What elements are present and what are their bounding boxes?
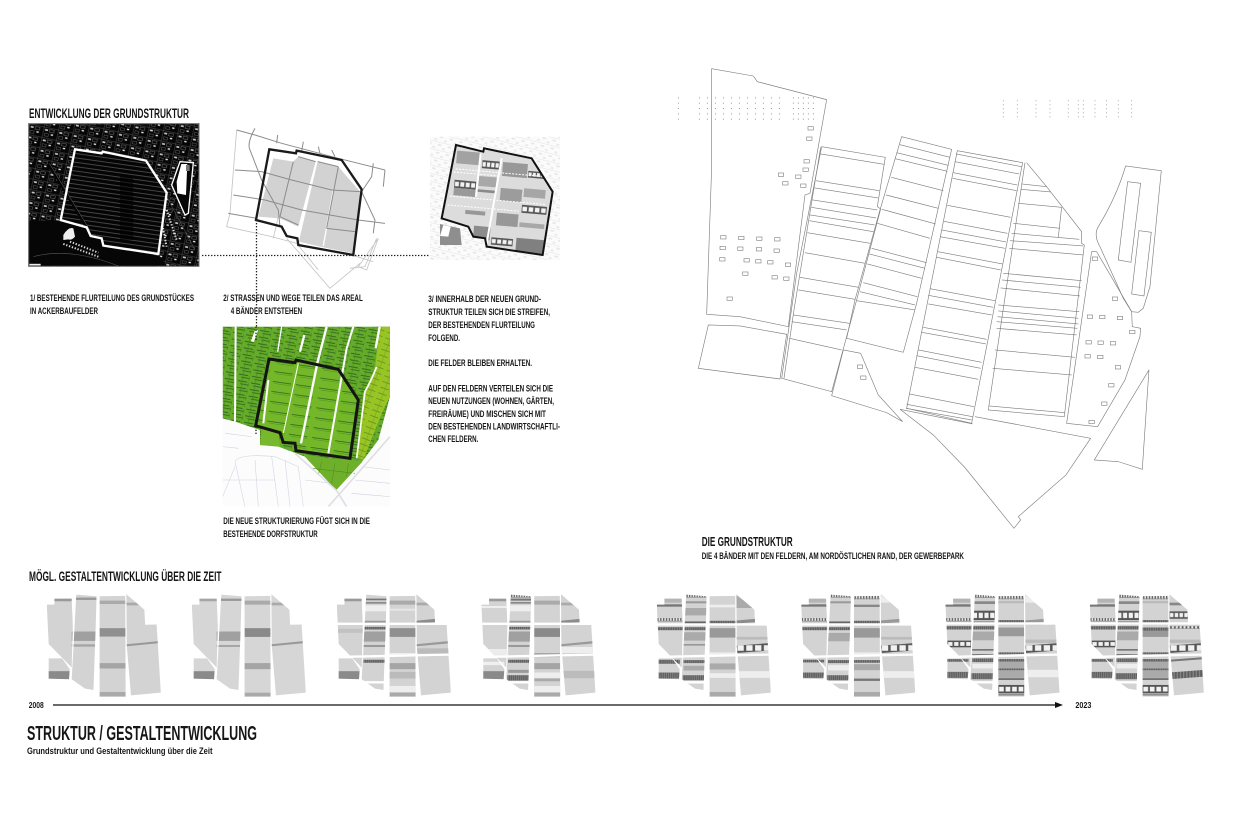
heading: Die Grundstruktur	[702, 535, 964, 561]
band: strip three	[832, 137, 952, 422]
text: step 3: DER BESTEHENDEN FLURTEILUNG	[428, 320, 535, 330]
text: caption of green map	[223, 516, 370, 539]
text: step 2	[223, 293, 363, 316]
map 1: existing field division, black	[28, 123, 199, 267]
main title: STRUKTUR / GESTALTENTWICKLUNG	[27, 723, 257, 745]
map 4: green village structure	[223, 327, 390, 507]
thumbnail 1	[47, 594, 161, 697]
text: step 3	[428, 294, 560, 444]
thumbnail 5	[656, 594, 771, 697]
heading: Mögl. Gestaltentwicklung: MÖGL. GESTALTENTWICKLUNG ÜBER DIE ZEIT	[29, 569, 222, 584]
text: caption of green map: DIE NEUE STRUKTURIERUNG FÜGT SICH IN DIE	[223, 516, 370, 526]
thumbnail 2	[192, 594, 306, 697]
small buildings	[720, 127, 1135, 424]
year 2023: 2023	[1075, 700, 1092, 710]
text: step 3: AUF DEN FELDERN VERTEILEN SICH DIE	[428, 384, 553, 394]
text: caption of green map: BESTEHENDE DORFSTRUKTUR	[223, 529, 318, 539]
east: commercial park	[1067, 166, 1161, 469]
band: strip two	[782, 147, 885, 392]
thumbnail 8	[1090, 594, 1204, 697]
text: step 3: NEUEN NUTZUNGEN (WOHNEN, GÄRTEN,	[428, 396, 554, 406]
band: strip four	[906, 151, 1023, 423]
text: step 1: IN ACKERBAUFELDER	[30, 306, 98, 316]
text: step 3: DIE FELDER BLEIBEN ERHALTEN.	[428, 358, 532, 368]
plan: die Grundstruktur line drawing	[678, 69, 1161, 528]
timeline arrow	[53, 702, 1063, 708]
text: step 3: CHEN FELDERN.	[428, 434, 478, 444]
map 2: streets dividing the area	[227, 128, 385, 288]
text: step 2: 2/ STRASSEN UND WEGE TEILEN DAS AREAL	[223, 293, 363, 303]
subtitle: Grundstruktur und Gestaltentwicklung über die Zeit	[27, 746, 213, 757]
south field	[900, 409, 1091, 528]
dotted connector lines	[202, 220, 432, 328]
cuts	[942, 623, 1068, 682]
cuts	[1086, 623, 1212, 682]
thumbnail 3	[337, 594, 451, 697]
text: step 2: 4 BÄNDER ENTSTEHEN	[231, 306, 302, 316]
text: step 3: STRUKTUR TEILEN SICH DIE STREIFEN,	[428, 307, 550, 317]
text: step 3: FOLGEND.	[428, 333, 460, 343]
thumbnail 7	[946, 594, 1060, 697]
dot grid west	[678, 97, 813, 120]
dot grid east	[1003, 100, 1132, 120]
cuts	[653, 624, 779, 682]
heading: Entwicklung der Grundstruktur: ENTWICKLUNG DER GRUNDSTRUKTUR	[29, 106, 189, 121]
cuts	[478, 624, 604, 682]
band: west fields	[698, 69, 827, 379]
text: step 1	[30, 293, 194, 316]
map 3: inner structure	[430, 137, 560, 260]
text: step 1: 1/ BESTEHENDE FLURTEILUNG DES GRUNDSTÜCKES	[30, 293, 194, 303]
heading: Die Grundstruktur: DIE GRUNDSTRUKTUR	[702, 535, 793, 549]
band: strip five	[988, 163, 1084, 417]
cuts	[797, 624, 924, 682]
text: step 3: DEN BESTEHENDEN LANDWIRTSCHAFTLI-	[428, 422, 560, 432]
cuts	[333, 624, 459, 682]
thumbnail 6	[801, 594, 915, 697]
text: step 3: 3/ INNERHALB DER NEUEN GRUND-	[428, 294, 541, 304]
heading: Die Grundstruktur: DIE 4 BÄNDER MIT DEN FELDERN, AM NORDÖSTLICHEN RAND, DER GEWERBEPARK	[702, 551, 964, 561]
year 2008: 2008	[29, 700, 44, 710]
text: step 3: FREIRÄUME) UND MISCHEN SICH MIT	[428, 409, 546, 419]
thumbnail 4	[482, 594, 596, 697]
